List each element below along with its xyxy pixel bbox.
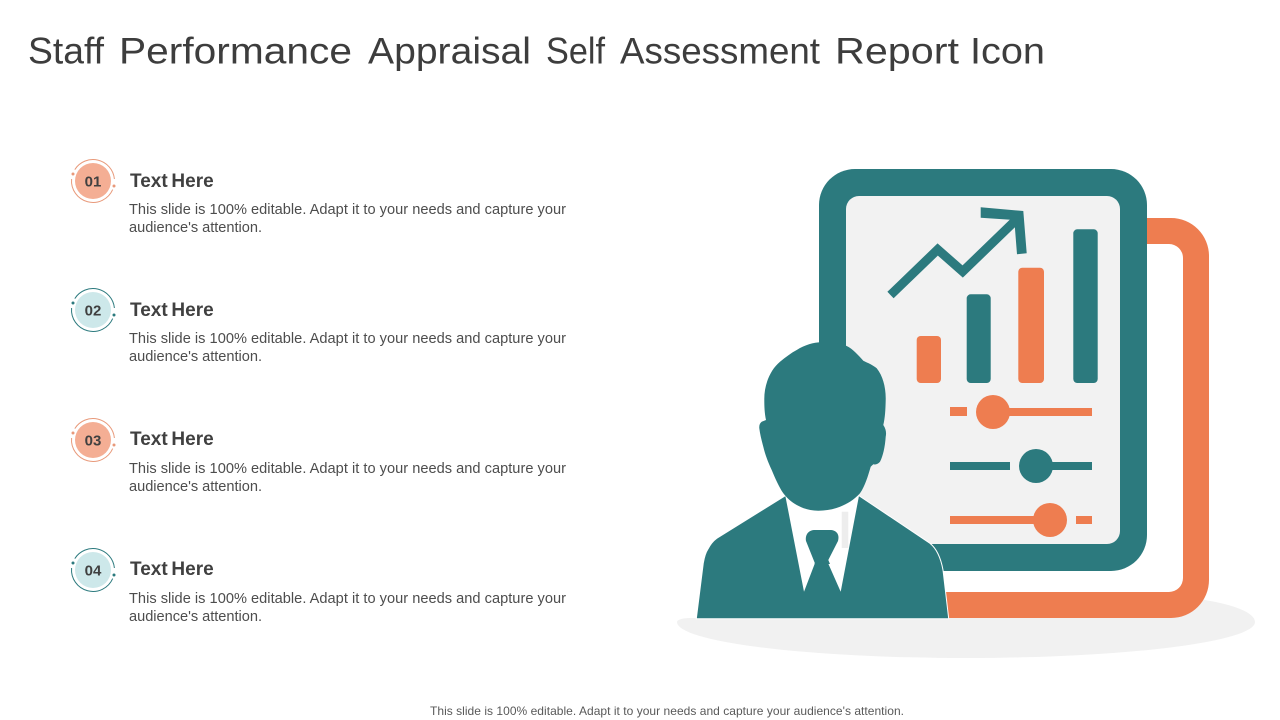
title: Report (835, 30, 960, 72)
slider 2 (950, 449, 1092, 483)
description 03: audience's attention. (129, 479, 262, 495)
person silhouette (696, 342, 949, 619)
badge 02: 02 (85, 302, 101, 320)
trend arrow (890, 207, 1027, 295)
badge 02 (72, 289, 116, 331)
title: Performance (119, 30, 352, 72)
bar chart (917, 229, 1098, 383)
ground shadow (677, 592, 1255, 658)
collar shade (842, 512, 848, 548)
badge 03: 03 (85, 432, 101, 450)
list item 03 (72, 419, 566, 495)
description 04: This slide is 100% editable. Adapt it to your needs and capture your (129, 591, 566, 607)
description 02: audience's attention. (129, 349, 262, 365)
description 03 (129, 461, 566, 495)
heading 04: Text Here (130, 559, 214, 580)
slider 3 (950, 503, 1092, 537)
title: Appraisal (368, 30, 531, 72)
title: Icon (970, 30, 1045, 72)
badge 04 (72, 549, 116, 591)
teal tablet frame (819, 169, 1147, 571)
description 01: audience's attention. (129, 220, 262, 236)
head (759, 342, 886, 511)
badge 03 (72, 419, 116, 461)
title: Self (546, 30, 606, 72)
description 01 (129, 202, 566, 236)
heading 01: Text Here (130, 171, 214, 192)
title: Staff (28, 30, 105, 72)
description 03: This slide is 100% editable. Adapt it to your needs and capture your (129, 461, 566, 477)
footer note: This slide is 100% editable. Adapt it to your needs and capture your audience's attention. (430, 704, 904, 718)
list item 04 (72, 549, 566, 625)
badge 01: 01 (85, 174, 101, 190)
list item 01 (72, 160, 566, 236)
tie knot (806, 530, 839, 564)
title (28, 30, 1045, 72)
orange back frame (930, 218, 1209, 618)
tablet screen (846, 196, 1120, 544)
slider 1 (950, 395, 1092, 429)
badge 04: 04 (85, 562, 102, 580)
description 02 (129, 331, 566, 365)
list item 02 (72, 289, 566, 365)
description 02: This slide is 100% editable. Adapt it to your needs and capture your (129, 331, 566, 347)
heading 02: Text Here (130, 300, 214, 321)
shirt collar (785, 496, 859, 592)
description 04: audience's attention. (129, 609, 262, 625)
description 04 (129, 591, 566, 625)
badge 01 (72, 160, 116, 202)
illustration: person with report tablet (677, 169, 1255, 658)
title: Assessment (620, 30, 821, 72)
suit (696, 496, 949, 619)
heading 03: Text Here (130, 429, 214, 450)
description 01: This slide is 100% editable. Adapt it to your needs and capture your (129, 202, 566, 218)
